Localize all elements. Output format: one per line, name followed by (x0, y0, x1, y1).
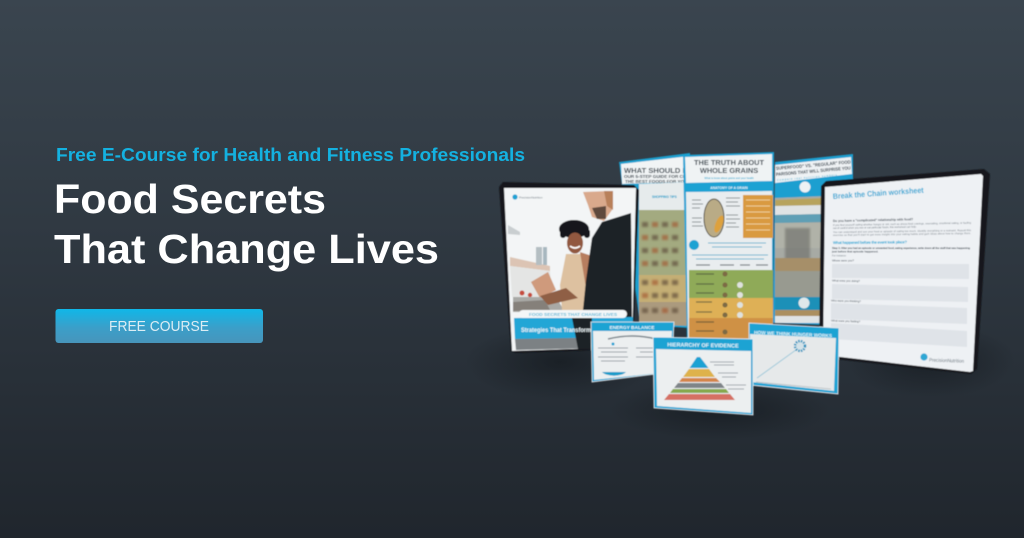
worksheet fields: For instance: (832, 254, 847, 258)
poster: what should I eat: THE BEST FOODS FOR YOUR (625, 179, 691, 184)
worksheet logo (920, 353, 964, 365)
poster: the truth about whole grains: What to know about grains and your health (704, 176, 754, 180)
worksheet section heading: What happened before the event took place? (833, 239, 908, 245)
poster: the truth about whole grains: WHOLE GRAINS (700, 166, 758, 175)
poster: what should I eat: OUR 5-STEP GUIDE FOR CHOOSING (624, 174, 705, 179)
title: That Change Lives (54, 226, 439, 272)
poster heading: THE TRUTH ABOUT (694, 158, 764, 167)
grain diagram (692, 198, 740, 237)
worksheet intro: Do you have a "complicated" relationship with food? (833, 217, 913, 223)
poster: the truth about whole grains (683, 152, 774, 342)
card: energy balance (591, 322, 674, 382)
poster: what should I eat: WHAT SHOULD I EAT (624, 166, 702, 175)
cover logo: PrecisionNutrition (519, 196, 543, 200)
product mockups (499, 152, 990, 415)
worksheet fields: just before that episode happened. (831, 250, 879, 254)
title (54, 176, 439, 272)
worksheet heading: Break the Chain worksheet (833, 186, 924, 201)
left tablet (499, 182, 639, 353)
subtitle: Free E-Course for Health and Fitness Professionals (56, 144, 525, 165)
worksheet fields (831, 246, 970, 347)
woman (560, 254, 592, 312)
right tablet (819, 169, 990, 374)
cover pill (519, 310, 627, 318)
poster: what should I eat (619, 153, 705, 328)
poster: what should I eat: SHOPPING TIPS (652, 195, 677, 199)
product shadows (465, 322, 1015, 440)
cover pill: FOOD SECRETS THAT CHANGE LIVES (529, 312, 617, 317)
poster: superfood vs regular food: SUPERFOOD" VS. "REGULAR" FOOD (776, 159, 851, 171)
cover band (514, 317, 633, 340)
worksheet intro: exercise so that you'll start to get more insight into your eating habits and gain ideas about how to change them. (833, 232, 971, 237)
orange table (743, 195, 773, 238)
worksheet intro: If you find yourself eating whether hungry or not, such as stress food cravings, overeating, emotional eating, or feeling (833, 222, 972, 227)
comparison table (689, 270, 773, 341)
poster: superfood vs regular food (773, 154, 853, 325)
worksheet intro: You can understand and see your food or episode of eating too much. Identify everything or a restraint. Repeat this (833, 229, 972, 234)
poster: the truth about whole grains: ANATOMY OF A GRAIN (710, 186, 748, 190)
button: free course (56, 309, 263, 343)
card: hierarchy of evidence: HIERARCHY OF EVIDENCE (667, 342, 739, 350)
button: free course: FREE COURSE (109, 319, 209, 335)
card: how we think hunger works (749, 323, 839, 394)
card: hierarchy of evidence (653, 337, 753, 415)
kitchen photo (508, 191, 632, 320)
poster: superfood vs regular food: PARISONS THAT WILL SURPRISE YOU (776, 165, 851, 177)
man (582, 213, 632, 320)
worksheet logo: PrecisionNutrition (929, 358, 964, 365)
cover logo (512, 194, 543, 200)
woman hair (559, 220, 589, 238)
cover subtitle: Strategies That Transform (521, 327, 591, 334)
worksheet fields: What were you feeling? (831, 319, 861, 324)
title: Food Secrets (54, 176, 326, 222)
food grid (642, 222, 678, 313)
card: how we think hunger works: HOW WE THINK HUNGER WORKS (754, 330, 832, 338)
worksheet fields: Where were you? (832, 258, 854, 262)
worksheet intro (833, 217, 972, 237)
poster: superfood vs regular food: Compare real nutrition numbers (777, 173, 838, 182)
worksheet intro: out of control when you see or eat particular foods, this worksheet can help. (833, 226, 917, 230)
worksheet fields: What were you doing? (832, 279, 860, 283)
evidence pyramid (664, 357, 735, 400)
card: energy balance: ENERGY BALANCE (610, 325, 655, 331)
worksheet fields: Who were you thinking? (831, 299, 861, 303)
worksheet fields: Step 1: After you had an episode or unwanted food, eating experience, write down all the stuff that was happening (832, 246, 970, 250)
blue badge (689, 240, 699, 250)
